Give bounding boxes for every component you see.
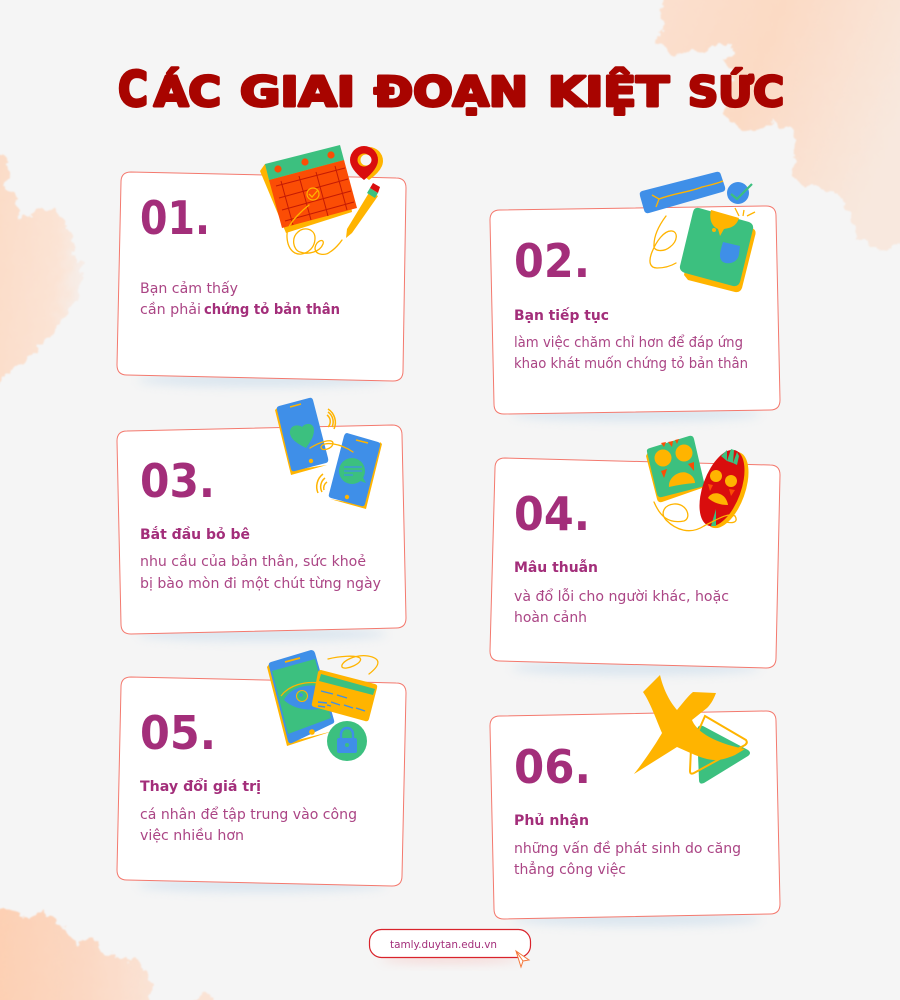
panel: step 06	[490, 675, 780, 926]
heading: step 02: Bạn tiếp tục	[514, 307, 609, 324]
text: step 02: khao khát muốn chứng tỏ bản thân	[514, 355, 748, 372]
text: step 02	[514, 334, 748, 372]
panel: step 03	[117, 398, 406, 641]
number 04: 04.	[514, 487, 590, 541]
text: step 06: những vấn đề phát sinh do căng	[514, 840, 741, 857]
icon: cursor	[516, 951, 529, 967]
brush stroke: bottom left	[0, 909, 152, 1000]
heading: step 05: Thay đổi giá trị	[140, 778, 261, 795]
text: step 02: làm việc chăm chỉ hơn để đáp ứng	[514, 334, 743, 351]
text: step 06	[514, 840, 741, 878]
text: step 05: việc nhiều hơn	[140, 827, 244, 844]
heading: step 04: Mâu thuẫn	[514, 559, 598, 576]
heading: step 06: Phủ nhận	[514, 813, 589, 829]
text: step 03	[140, 554, 381, 592]
text: step 05	[140, 806, 357, 844]
number 03: 03.	[140, 454, 215, 508]
footer url: tamly.duytan.edu.vn	[390, 939, 497, 951]
text: step 03: bị bào mòn đi một chút từng ngày	[140, 576, 381, 592]
text: step 01: chứng tỏ bản thân	[204, 302, 340, 318]
icon: two phones	[275, 398, 382, 509]
text: step 04	[514, 588, 729, 626]
icon: masks	[646, 436, 758, 534]
icon: phone, eye, credit card and lock	[267, 650, 378, 761]
text: step 06: thẳng công việc	[514, 861, 626, 878]
icon: shirt card and check	[640, 172, 756, 292]
title: SỨC	[688, 68, 784, 116]
title: ĐOẠN	[374, 68, 528, 116]
text: step 01	[140, 281, 340, 318]
panel: step 05	[117, 650, 406, 892]
panel: step 02	[490, 172, 780, 421]
number 02: 02.	[514, 234, 590, 288]
icon: X mark and play triangles	[634, 675, 750, 784]
text: step 03: nhu cầu của bản thân, sức khoẻ	[140, 554, 366, 570]
text: step 01: cần phải	[140, 302, 201, 318]
title: C	[118, 62, 148, 118]
title: KIỆT	[548, 68, 669, 116]
brush stroke: left	[0, 153, 82, 390]
panel: step 04	[490, 436, 780, 675]
number 05: 05.	[140, 706, 216, 760]
footer link pill	[370, 930, 530, 967]
heading: step 03: Bắt đầu bỏ bê	[140, 526, 250, 543]
title: GIAI	[240, 68, 355, 116]
title	[118, 62, 784, 118]
brush stroke: top right	[655, 0, 900, 250]
brush stroke: bottom small	[188, 990, 216, 1000]
panel: step 01	[117, 145, 406, 387]
text: step 04: hoàn cảnh	[514, 610, 587, 626]
title: ÁC	[154, 68, 221, 116]
text: step 04: và đổ lỗi cho người khác, hoặc	[514, 588, 729, 605]
icon: calendar, pin and pencil	[260, 145, 383, 254]
text: step 01: Bạn cảm thấy	[140, 281, 238, 297]
number 06: 06.	[514, 740, 591, 794]
number 01: 01.	[140, 191, 210, 245]
text: step 05: cá nhân để tập trung vào công	[140, 806, 357, 823]
